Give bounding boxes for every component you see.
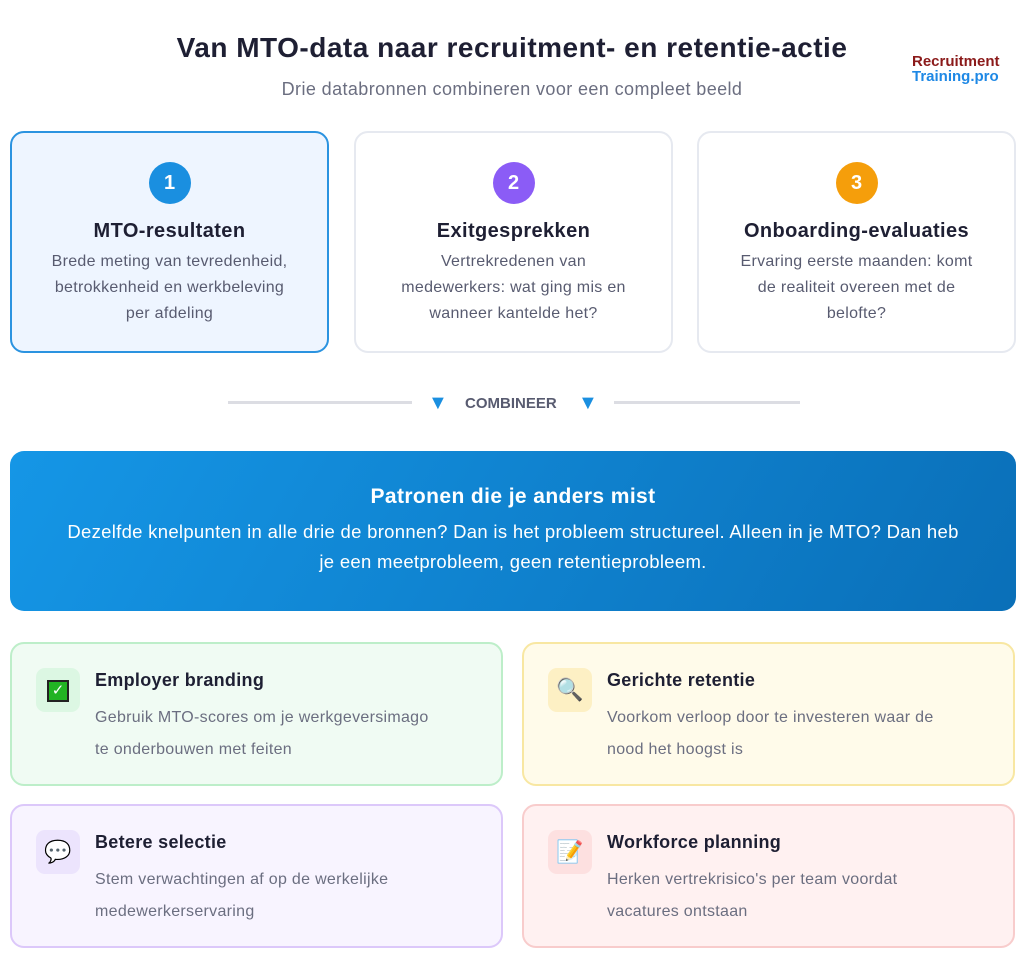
card: gerichte retentie: Gerichte retentie (607, 670, 755, 690)
card: employer branding (10, 642, 503, 786)
banner: patronen: je een meetprobleem, geen retentieprobleem. (319, 551, 707, 572)
card 1: MTO-resultaten: 1 (164, 172, 175, 194)
card 1: MTO-resultaten: Brede meting van tevredenheid, betrokkenheid en werkbeleving per afdeling (52, 253, 287, 322)
card 3: Onboarding: Ervaring eerste maanden: komt de realiteit overeen met de belofte? (741, 253, 972, 322)
card 3: Onboarding: 3 (851, 172, 862, 194)
card: workforce planning: 📝 (556, 839, 584, 864)
card: employer branding: Gebruik MTO-scores om je werkgeversimago (95, 709, 429, 726)
card: workforce planning (522, 804, 1015, 948)
card 1: MTO-resultaten: MTO-resultaten (94, 220, 245, 242)
logo: Training.pro (912, 68, 999, 85)
card: workforce planning: Workforce planning (607, 832, 781, 852)
combineer divider: COMBINEER (465, 395, 557, 412)
combineer divider (228, 392, 800, 414)
logo: Recruitment (912, 53, 1000, 70)
card: gerichte retentie: 🔍 (556, 677, 584, 702)
card: employer branding: te onderbouwen met feiten (95, 741, 292, 758)
banner: patronen (10, 451, 1016, 611)
card 2: Exitgesprekken (354, 131, 673, 353)
card: betere selectie (10, 804, 503, 948)
card: betere selectie: Stem verwachtingen af op de werkelijke medewerkerservaring (95, 871, 388, 920)
card: employer branding: Employer branding (95, 670, 264, 690)
card: gerichte retentie: Voorkom verloop door te investeren waar de nood het hoogst is (607, 709, 934, 758)
card 2: Exitgesprekken: 2 (508, 172, 519, 194)
card 2: Exitgesprekken: Vertrekredenen van medewerkers: wat ging mis en wanneer kantelde het? (401, 253, 626, 322)
combineer divider: ▼ (578, 392, 598, 414)
logo (912, 53, 1000, 85)
subtitle: Drie databronnen combineren voor een compleet beeld (282, 79, 742, 99)
card: betere selectie: 💬 (44, 839, 72, 864)
title: Van MTO-data naar recruitment- en retentie-actie (177, 32, 847, 63)
banner: patronen: Patronen die je anders mist (370, 485, 656, 508)
card: employer branding: ✓ (52, 682, 64, 699)
card: workforce planning: Herken vertrekrisico's per team voordat vacatures ontstaan (607, 871, 897, 920)
card: betere selectie: Betere selectie (95, 832, 227, 852)
card 3: Onboarding (697, 131, 1016, 353)
card 1: MTO-resultaten (10, 131, 329, 353)
combineer divider: ▼ (428, 392, 448, 414)
card 3: Onboarding: Onboarding-evaluaties (744, 220, 969, 242)
card 2: Exitgesprekken: Exitgesprekken (437, 220, 590, 242)
card: gerichte retentie (522, 642, 1015, 786)
banner: patronen: Dezelfde knelpunten in alle drie de bronnen? Dan is het probleem structureel. Alleen in je MTO? Dan heb (67, 521, 959, 542)
